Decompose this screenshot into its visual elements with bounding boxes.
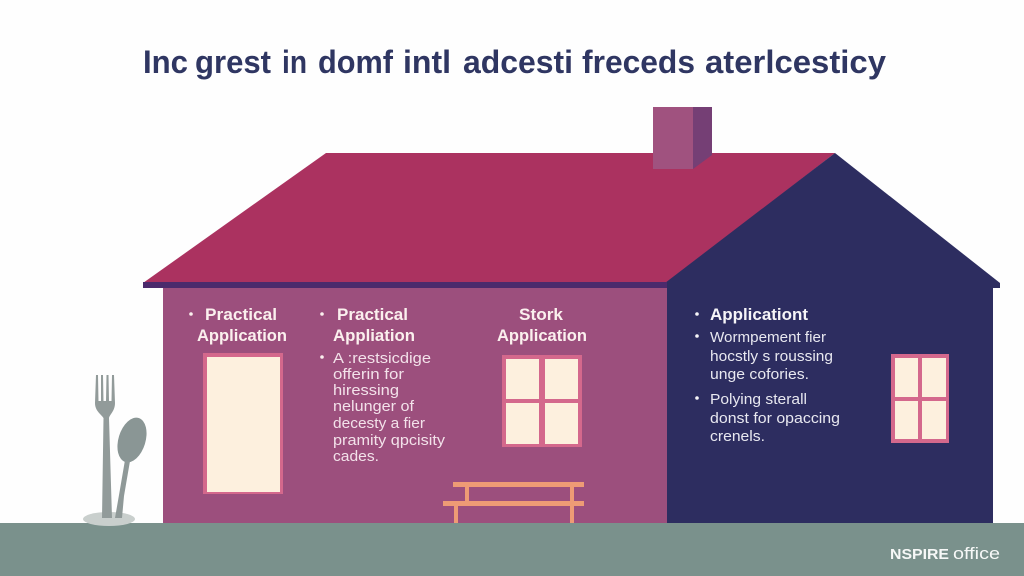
body text [333,350,446,465]
heading second line: Appliation [333,327,415,345]
icon: fork and spoon [83,375,152,526]
title: in [282,44,307,80]
roof eave [143,282,667,288]
roof: magenta slope [143,153,835,283]
body text one: Wormpement fier [710,329,826,346]
icon: bench [443,482,584,523]
bullet [695,334,699,338]
panel: second practical application [320,306,446,465]
body text one: hocstly s roussing [710,348,833,365]
title: domf [318,44,393,80]
body text two [710,391,840,445]
body text: hiressing [333,382,399,399]
icon: navy wall window [891,354,949,443]
logo: office [953,544,1000,563]
body text one [710,329,833,383]
body text two: Polying sterall [710,391,807,408]
logo: NSPIRE [890,546,949,563]
bullet [320,312,324,316]
bullet [320,355,324,359]
heading: Applicationt [710,306,809,324]
heading second line: Application [197,327,287,345]
icon: four-pane window [502,355,582,447]
ground [0,523,1024,576]
title: Inc [143,44,188,80]
body text one: unge cofories. [710,366,809,383]
body text: offerin for [333,366,404,383]
body text: pramity qpcisity [333,432,446,449]
title: intl [403,44,451,80]
panel: first practical application [189,306,287,345]
bullet [695,396,699,400]
title [143,44,886,80]
heading: Practical [337,306,408,324]
body text: nelunger of [333,398,415,415]
bullet [189,312,193,316]
icon: tall door window [203,353,283,494]
title: grest [195,44,271,80]
title: aterlcesticy [705,44,886,80]
heading second line: Application [497,327,587,345]
heading: Stork [519,306,564,324]
body text: decesty a fier [333,415,425,432]
body text: A :restsicdige [333,350,431,367]
chimney [653,107,712,169]
body text two: crenels. [710,428,765,445]
logo [890,544,1000,563]
title: freceds [582,44,695,80]
roof: navy gable [665,153,1000,288]
body text: cades. [333,448,379,465]
body text two: donst for opaccing [710,410,840,427]
title: adcesti [463,44,573,80]
house wall: left section [163,286,667,524]
bullet [695,312,699,316]
panel: application on navy wall [695,306,840,445]
panel: stork application [497,306,587,345]
house wall: right section [667,286,993,524]
heading: Practical [205,306,277,324]
